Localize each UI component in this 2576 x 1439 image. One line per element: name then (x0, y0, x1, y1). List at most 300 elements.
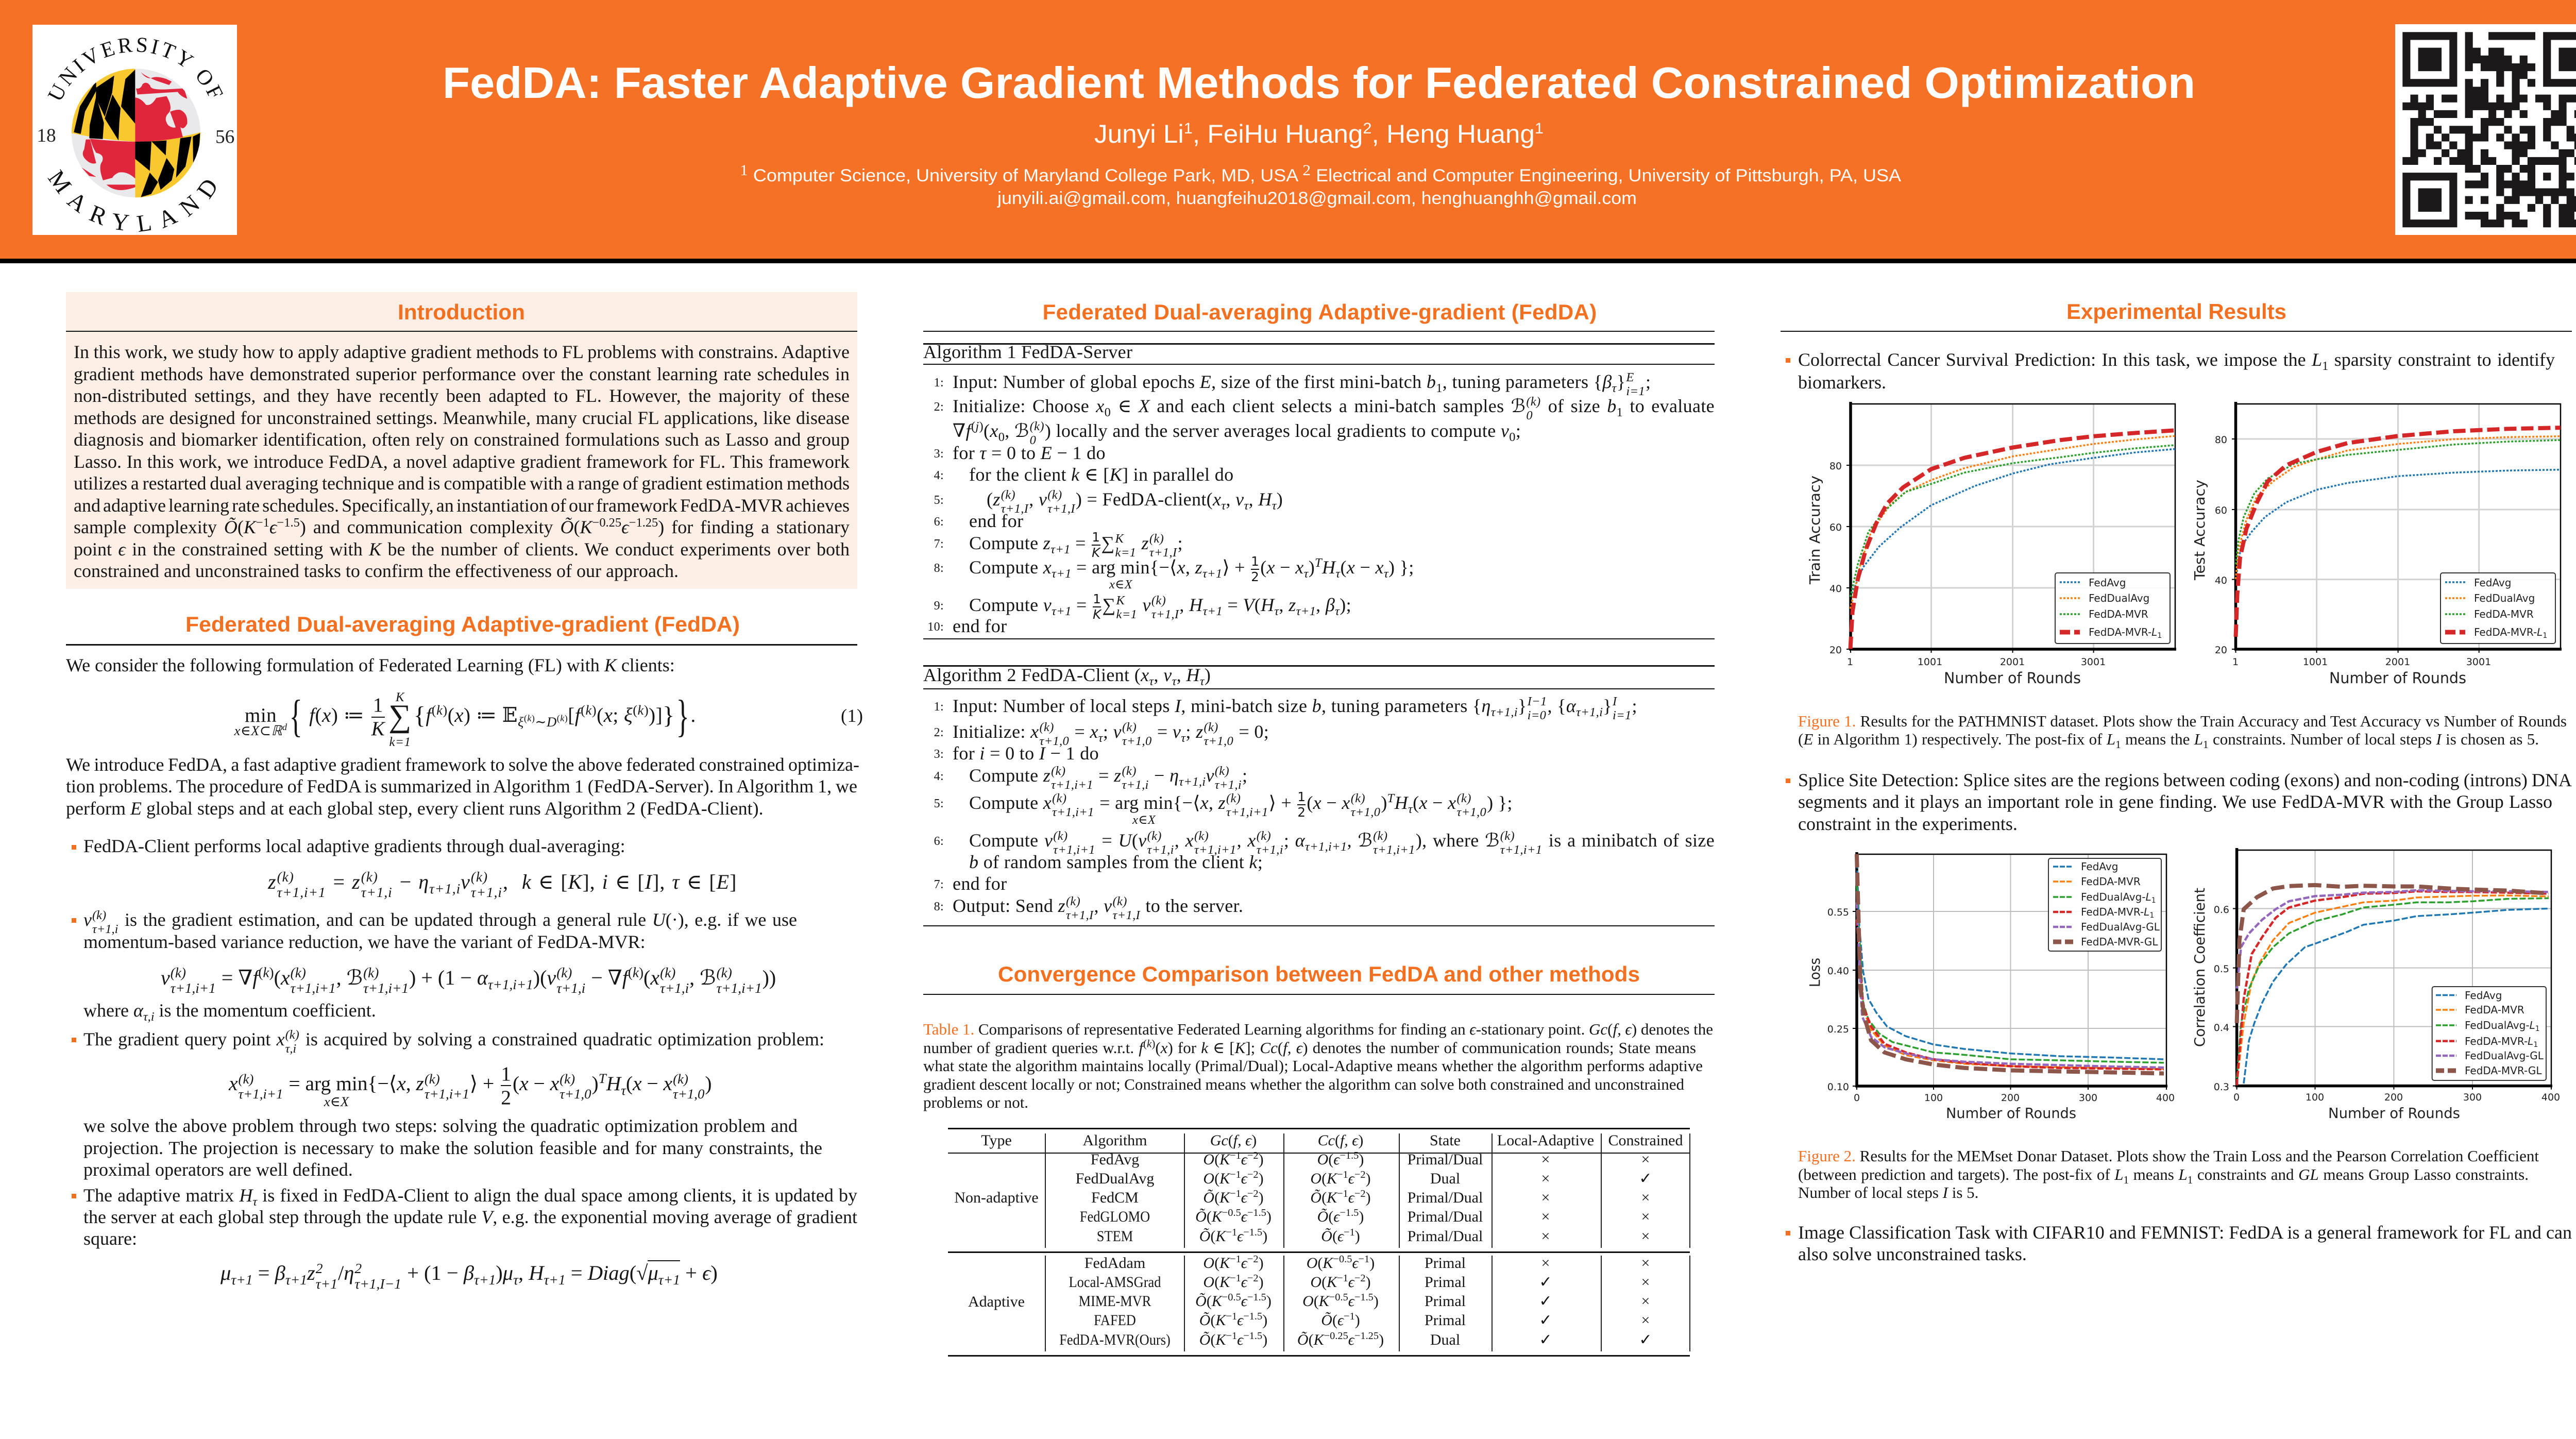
bullet: image classification task (1781, 1220, 2572, 1266)
chart: test accuracy: 1 (2232, 656, 2239, 668)
algorithm 2: FedDA-Client: (k) (1051, 764, 1065, 778)
chart: train loss: 400 (2156, 1092, 2175, 1104)
chart: train loss: FedAvg (2081, 860, 2118, 873)
algorithm 2: FedDA-Client: 2 (1297, 805, 1306, 820)
chart: train loss: 0.25 (1827, 1024, 1849, 1035)
algorithm 1: FedDA-Server: 3: (934, 447, 944, 461)
equation: FedDA-MVR variant: (k) (660, 965, 675, 980)
introduction text: diagnosis and biomarker identification, often rely on constrained formulations such as Lasso and group (74, 429, 850, 450)
comparison table: × (1641, 1189, 1650, 1206)
figure 1 caption (1798, 711, 2567, 750)
table caption: gradient descent locally or not; Constrained means whether the algorithm can solve both constrained and unconstrained (923, 1075, 1684, 1093)
figure 2 caption: (between prediction and targets). The post-fix of L1 means L1 constraints and GL means Group Lasso constraints. (1798, 1165, 2529, 1186)
algorithm 1: FedDA-Server: (k) (1526, 395, 1541, 409)
icon: QR code (2395, 24, 2576, 235)
chart: train accuracy: Number of Rounds (1944, 669, 2081, 687)
algorithm 1: FedDA-Server: 9: (934, 599, 944, 613)
text: momentum coefficient: where ατ,i is the momentum coefficient. (83, 1000, 376, 1024)
comparison table: ✓ (1639, 1170, 1652, 1187)
equation 1: (1) (841, 705, 863, 726)
authors: , FeiHu Huang (1193, 120, 1363, 148)
algorithm 1: FedDA-Server: k=1 (1116, 607, 1137, 621)
chart: train loss: 1 (2149, 911, 2154, 920)
algorithm 1: FedDA-Server: 10: (927, 620, 944, 634)
comparison table: ✓ (1539, 1312, 1552, 1329)
chart: correlation coefficient: 1 (2533, 1041, 2538, 1049)
comparison table: × (1641, 1151, 1650, 1168)
comparison table: O(ϵ−1.5) (1317, 1150, 1364, 1168)
chart: train loss: 0 (1854, 1092, 1860, 1104)
chart: train loss (1803, 848, 2179, 1123)
chart: correlation coefficient: 300 (2463, 1092, 2482, 1103)
algorithm 2: FedDA-Client: (k) (1456, 791, 1471, 805)
algorithm 2: FedDA-Client: (k) (1122, 764, 1137, 778)
bullet: splice site detection: constraint in the experiments. (1798, 814, 2018, 834)
chart: train loss: 0.55 (1827, 907, 1849, 918)
chart: correlation coefficient: FedDualAvg-L (2465, 1019, 2535, 1031)
comparison table: O(K−1ϵ−2) (1310, 1169, 1371, 1187)
comparison table: Õ(K−1ϵ−2) (1310, 1188, 1371, 1206)
logo: University of Maryland seal: 56 (215, 126, 234, 147)
chart: test accuracy (2190, 399, 2571, 688)
bullet: gradient estimation: (k) (92, 908, 106, 922)
equation: constrained quadratic problem: τ+1,0 (560, 1086, 591, 1102)
algorithm 2: FedDA-Client: (k) (1053, 829, 1067, 843)
authors: Junyi Li (1094, 120, 1182, 148)
equation: constrained quadratic problem: τ+1,0 (673, 1086, 704, 1102)
bullet: adaptive matrix (72, 1185, 857, 1249)
table caption (923, 1019, 1715, 1113)
comparison table: Adaptive (968, 1293, 1025, 1310)
chart: correlation coefficient: 0.6 (2214, 904, 2229, 916)
figure 2 caption (1798, 1146, 2539, 1204)
algorithm 2: FedDA-Client: (k) (1066, 894, 1080, 908)
algorithm 2: FedDA-Client: 8: (934, 900, 944, 913)
chart: correlation coefficient: FedAvg (2465, 989, 2502, 1002)
chart: correlation coefficient: 1 (2535, 1025, 2540, 1033)
chart: train loss: 200 (2001, 1092, 2020, 1104)
algorithm 1: FedDA-Server: 5: (934, 494, 944, 507)
introduction text: and adaptive learning rate schedules. Specifically, an instantiation of our framework FedDA-MVR achieves (74, 495, 850, 515)
chart: test accuracy: 80 (2215, 434, 2227, 446)
chart: train loss: Number of Rounds (1946, 1105, 2076, 1122)
chart: test accuracy: FedDA-MVR-L (2474, 626, 2543, 638)
comparison table: O(K−0.5ϵ−1) (1307, 1254, 1375, 1272)
equation 1: { (290, 691, 302, 741)
comparison table: Õ(ϵ−1) (1321, 1227, 1360, 1245)
table caption: what state the algorithm maintains locally (Primal/Dual); Local-Adaptive means whether the algorithm performs adaptive (923, 1057, 1703, 1075)
comparison table: Gc(f, ϵ) (1210, 1132, 1257, 1149)
algorithm 1: FedDA-Server: τ+1,I (1001, 502, 1028, 516)
comparison table: Primal (1425, 1312, 1466, 1329)
algorithm 2: FedDA-Client: τ+1,I (1066, 908, 1093, 922)
algorithm 1: FedDA-Server: i=1 (1626, 384, 1645, 398)
algorithm 2: FedDA-Client: I−1 (1528, 695, 1547, 708)
bullet: splice site detection: Splice Site Detection: Splice sites are the regions between coding (exons) and non-coding (introns) DNA (1798, 770, 2572, 790)
algorithm 2: FedDA-Client: I (1613, 695, 1617, 708)
comparison table: × (1641, 1274, 1650, 1291)
algorithm 2: FedDA-Client: (k) (1257, 829, 1271, 843)
chart: test accuracy: 1 (2543, 632, 2547, 640)
algorithm 2: FedDA-Client: τ+1,i+1 (1052, 805, 1094, 819)
text: FedDA introduction: We introduce FedDA, a fast adaptive gradient framework to solve the above federated constrained optimiza- (66, 754, 859, 775)
equation 1: min (245, 704, 277, 726)
equation: constrained quadratic problem: τ+1,i+1 (425, 1086, 469, 1102)
comparison table: × (1641, 1293, 1650, 1310)
algorithm 2: FedDA-Client: Input: Number of local steps I, mini-batch size b, tuning parameters {ητ+1,i} , {ατ+1,i} ; (953, 696, 1637, 719)
comparison table: Õ(K−1ϵ−1.5) (1199, 1311, 1267, 1329)
bullet: gradient query point: τ,i (285, 1042, 296, 1056)
chart: train accuracy: 80 (1829, 461, 1842, 472)
comparison table: Primal (1425, 1255, 1466, 1272)
algorithm 2: FedDA-Client: (k) (1052, 791, 1066, 805)
chart: train accuracy (1803, 399, 2184, 688)
panel: federated dual-averaging formulation: τ+1 (316, 1276, 337, 1292)
bullet: adaptive matrix: the server at each global step through the update rule V, e.g. the exponential moving average of gradient (83, 1207, 857, 1227)
comparison table: Primal (1425, 1274, 1466, 1291)
algorithm 1: FedDA-Server: Input: Number of global epochs E, size of the first mini-batch b1, tuning parameters {βτ} ; (953, 371, 1651, 395)
equation: FedDA-MVR variant: (k) (291, 965, 306, 980)
algorithm 2: FedDA-Client: τ+1,0 (1122, 734, 1152, 748)
chart: test accuracy: 3001 (2466, 656, 2491, 668)
comparison table: Primal/Dual (1408, 1208, 1483, 1225)
algorithm 2: FedDA-Client: 3: (934, 748, 944, 761)
equation: FedDA-MVR variant: (k) (556, 965, 572, 980)
table caption: number of gradient queries w.r.t. f(k)(x) for k ∈ [K]; Cc(f, ϵ) denotes the number of communication rounds; State means (923, 1038, 1696, 1057)
algorithm 2: FedDA-Client (923, 665, 1715, 928)
comparison table: ✓ (1639, 1331, 1652, 1348)
comparison table: FAFED (1094, 1312, 1136, 1329)
equation: constrained quadratic problem: x = {−⟨x, z ⟩ + (x − x )THτ(x − x ) (229, 1071, 712, 1098)
chart: train loss: FedDA-MVR-L (2081, 906, 2149, 918)
chart: correlation coefficient: 0.5 (2214, 963, 2229, 975)
equation: exponential moving average: μτ+1 = βτ+1z /η + (1 − βτ+1)μτ, Hτ+1 = Diag(√μτ+1 + ϵ) (221, 1261, 718, 1288)
chart: correlation coefficient: 0.4 (2214, 1022, 2229, 1034)
table caption: Table 1. Comparisons of representative Federated Learning algorithms for finding an ϵ-stationary point. Gc(f, ϵ) denotes the (923, 1020, 1713, 1038)
algorithm 2: FedDA-Client: τ+1,I (1113, 908, 1140, 922)
algorithm 1: FedDA-Server: (k) (1151, 594, 1166, 607)
algorithm 2: FedDA-Client: τ+1,i (1215, 778, 1242, 792)
algorithm 1: FedDA-Server: 7: (934, 537, 944, 551)
equation: dual averaging update: τ+1,i (361, 885, 393, 900)
equation: dual averaging update: τ+1,i+1 (277, 885, 326, 900)
equation: FedDA-MVR variant: τ+1,i (556, 980, 585, 996)
equation: FedDA-MVR variant: τ+1,i+1 (363, 980, 409, 996)
equation 1 (234, 690, 863, 749)
comparison table: Primal (1425, 1293, 1466, 1310)
chart: test accuracy: FedDA-MVR (2474, 608, 2534, 620)
heading: Federated Dual-averaging Adaptive-gradient: Federated Dual-averaging Adaptive-gradient (FedDA) (185, 612, 740, 636)
comparison table (948, 1128, 1690, 1357)
algorithm 1: FedDA-Server: K (1115, 532, 1124, 546)
algorithm 1: FedDA-Server: end for (969, 511, 1023, 531)
chart: train accuracy: FedDA-MVR-L (2089, 626, 2157, 638)
algorithm 1: FedDA-Server: Compute xτ+1 = {−⟨x, zτ+1⟩ + (x − xτ)THτ(x − xτ) }; (969, 556, 1414, 581)
equation: dual averaging update: (k) (471, 869, 488, 885)
equation: constrained quadratic problem: (k) (673, 1071, 688, 1087)
chart: train loss: 0.40 (1827, 966, 1849, 977)
algorithm 2: FedDA-Client: Compute ν = U(ν , x , x ; ατ+1,i+1, ℬ ), where ℬ is a minibatch of size (969, 830, 1715, 854)
algorithm 2: FedDA-Client: for i = 0 to I − 1 do (953, 743, 1099, 764)
table caption: problems or not. (923, 1093, 1028, 1111)
comparison table: Primal/Dual (1408, 1151, 1483, 1168)
comparison table: O(K−0.5ϵ−1.5) (1302, 1292, 1379, 1310)
bullet: splice site detection (1781, 767, 2572, 835)
equation: constrained quadratic problem (229, 1062, 712, 1109)
equation: constrained quadratic problem: (k) (239, 1071, 253, 1087)
algorithm 2: FedDA-Client: end for (953, 873, 1007, 894)
introduction text: methods are designed for unconstrained settings. Meanwhile, many crucial FL applications, like disease (74, 407, 850, 428)
logo: University of Maryland seal: UNIVERSITY OF (47, 38, 223, 99)
chart: test accuracy: 60 (2215, 505, 2227, 516)
algorithm 1: FedDA-Server: τ+1,I (1047, 502, 1075, 516)
algorithm 2: FedDA-Client: Initialize: x = xτ; ν = ντ; z = 0; (953, 721, 1269, 745)
chart: train accuracy: 20 (1829, 645, 1842, 656)
algorithm 1: FedDA-Server: 0 (1526, 409, 1533, 422)
text: two step solution (83, 1115, 822, 1180)
comparison table: ✓ (1539, 1331, 1552, 1348)
comparison table: Õ(ϵ−1.5) (1317, 1207, 1364, 1225)
bullet: splice site detection: segments and it plays an important role in gene finding. We use FedDA-MVR with the Group Lasso (1798, 791, 2552, 812)
chart: train accuracy: 1 (1847, 656, 1853, 668)
equation: FedDA-MVR variant: (k) (717, 965, 732, 980)
chart: train loss: FedDualAvg-GL (2081, 921, 2160, 933)
affiliations: Computer Science, University of Maryland College Park, MD, USA (748, 166, 1302, 185)
introduction text: Lasso. In this work, we introduce FedDA, a novel adaptive gradient framework for FL. This framework (74, 451, 850, 472)
equation: FedDA-MVR variant: τ+1,i+1 (291, 980, 336, 996)
chart: train loss: FedDA-MVR (2081, 875, 2141, 888)
figure 2 caption: Number of local steps I is 5. (1798, 1183, 1978, 1201)
comparison table: Local-AMSGrad (1069, 1274, 1161, 1291)
panel: federated dual-averaging formulation: τ+1,I−1 (354, 1276, 401, 1292)
algorithm 2: FedDA-Client: τ+1,0 (1039, 734, 1069, 748)
algorithm 1: FedDA-Server: Compute zτ+1 = ∑ z ; (969, 533, 1183, 556)
bullet: gradient estimation: ν is the gradient estimation, and can be updated through a general rule U(·), e.g. if we use (83, 909, 797, 930)
comparison table: Primal/Dual (1408, 1189, 1483, 1206)
bullet: colorectal cancer survival prediction: biomarkers. (1798, 372, 1886, 393)
algorithm 1: FedDA-Server: arg min (1092, 557, 1150, 578)
algorithm 1: FedDA-Server: 1: (934, 376, 944, 390)
equation: dual averaging update: z = z − ητ+1,iν , k ∈ [K], i ∈ [I], τ ∈ [E] (268, 870, 737, 896)
equation: constrained quadratic problem: 1 (501, 1062, 511, 1085)
panel: federated dual-averaging formulation: K (371, 718, 385, 740)
introduction text: point ϵ in the constrained setting with K be the number of clients. We conduct experiments over both (74, 539, 850, 560)
algorithm 2: FedDA-Client: τ+1,i+1 (1051, 778, 1093, 792)
comparison table: FedAvg (1091, 1151, 1139, 1168)
equation: FedDA-MVR variant: (k) (171, 965, 186, 980)
equation 1: } (676, 691, 689, 741)
chart: train accuracy: 40 (1829, 583, 1842, 595)
panel: federated dual-averaging formulation: K (396, 690, 404, 704)
introduction text: sample complexity Õ(K−1ϵ−1.5) and communication complexity Õ(K−0.25ϵ−1.25) for finding a stationary (74, 516, 850, 537)
equation: FedDA-MVR variant: τ+1,i (660, 980, 689, 996)
chart: train accuracy: 3001 (2081, 656, 2106, 668)
text: two step solution: we solve the above problem through two steps: solving the quadratic optimization problem and (83, 1115, 798, 1136)
equation: constrained quadratic problem: (k) (560, 1071, 575, 1087)
comparison table: Primal/Dual (1408, 1228, 1483, 1245)
comparison table: O(K−1ϵ−2) (1203, 1150, 1264, 1168)
algorithm 1: FedDA-Server: (k) (1149, 532, 1164, 546)
equation: FedDA-MVR variant: (k) (363, 965, 379, 980)
algorithm 1: FedDA-Server: ∇f(j)(x0, ℬ ) locally and the server averages local gradients to compute ν0; (953, 419, 1521, 444)
algorithm 2: FedDA-Client: b of random samples from the client k; (969, 852, 1263, 872)
text: two step solution: proximal operators are well defined. (83, 1159, 353, 1180)
algorithm 1: FedDA-Server: τ+1,I (1149, 546, 1177, 560)
figure 1 caption: Figure 1. Results for the PATHMNIST dataset. Plots show the Train Accuracy and Test Accuracy vs Number of Rounds (1798, 712, 2567, 730)
introduction text: In this work, we study how to apply adaptive gradient methods to FL problems with constrains. Adaptive (74, 342, 850, 362)
chart: correlation coefficient: FedDA-MVR-GL (2465, 1064, 2542, 1077)
bullet: colorectal cancer survival prediction (1781, 347, 2572, 396)
bullet: gradient query point: The gradient query point x is acquired by solving a constrained quadratic optimization problem: (83, 1029, 824, 1049)
algorithm 2: FedDA-Client: 6: (934, 835, 944, 848)
figure 2 caption: Figure 2. Results for the MEMset Donar Dataset. Plots show the Train Loss and the Pearson Correlation Coefficient (1798, 1147, 2539, 1165)
bullet: gradient query point: (k) (285, 1028, 299, 1042)
comparison table: × (1641, 1312, 1650, 1329)
logo: University of Maryland seal (32, 25, 237, 235)
comparison table: Algorithm (1083, 1132, 1147, 1149)
equation: constrained quadratic problem: τ+1,i+1 (239, 1086, 283, 1102)
bullet: adaptive matrix: square: (83, 1228, 137, 1249)
comparison table: × (1641, 1208, 1650, 1225)
algorithm 1: FedDA-Server: k=1 (1115, 546, 1136, 560)
chart: correlation coefficient: FedDA-MVR-L (2465, 1035, 2533, 1047)
comparison table: Non-adaptive (954, 1189, 1039, 1206)
text: FedDA introduction: tion problems. The procedure of FedDA is summarized in Algorithm 1 (FedDA-Server). In Algorithm 1, we (66, 776, 857, 797)
algorithm 2: FedDA-Client: τ+1,0 (1456, 805, 1486, 819)
affiliations: 1 (740, 162, 748, 179)
figure 1 caption: (E in Algorithm 1) respectively. The post-fix of L1 means the L1 constraints. Number of local steps I is chosen as 5. (1798, 730, 2539, 751)
algorithm 2: FedDA-Client: τ+1,i+1 (1226, 805, 1268, 819)
algorithm 2: FedDA-Client: 7: (934, 878, 944, 891)
chart: correlation coefficient (2190, 845, 2566, 1123)
algorithm 1: FedDA-Server (923, 343, 1715, 639)
comparison table: × (1641, 1255, 1650, 1272)
chart: train loss: 300 (2079, 1092, 2097, 1104)
comparison table: Cc(f, ϵ) (1318, 1132, 1363, 1149)
algorithm 2: FedDA-Client: arg min (1115, 792, 1173, 813)
chart: test accuracy: FedDualAvg (2474, 592, 2535, 604)
algorithm 1: FedDA-Server: Algorithm 1 FedDA-Server (923, 342, 1132, 362)
chart: correlation coefficient: 400 (2541, 1092, 2560, 1103)
chart: train accuracy: 2001 (2000, 656, 2025, 668)
algorithm 1: FedDA-Server: 1 (1092, 530, 1100, 545)
chart: test accuracy: FedAvg (2474, 577, 2511, 589)
algorithm 1: FedDA-Server: 2: (934, 400, 944, 414)
emails: junyili.ai@gmail.com, huangfeihu2018@gmail.com, henghuanghh@gmail.com (997, 189, 1637, 208)
bullet: colorectal cancer survival prediction: Colorrectal Cancer Survival Prediction: In this task, we impose the L1 sparsity constraint to identify (1798, 349, 2555, 373)
algorithm 1: FedDA-Server: for the client k ∈ [K] in parallel do (969, 464, 1233, 485)
algorithm 1: FedDA-Server: end for (953, 616, 1007, 636)
text: formulation intro: We consider the following formulation of Federated Learning (FL) with K clients: (66, 655, 675, 675)
chart: test accuracy: 40 (2215, 575, 2227, 586)
panel: algorithms (923, 292, 1715, 931)
comparison table: FedAdam (1084, 1255, 1145, 1272)
algorithm 2: FedDA-Client: 5: (934, 797, 944, 810)
algorithm 1: FedDA-Server: 1 (1093, 591, 1101, 606)
algorithm 2: FedDA-Client: (k) (1204, 720, 1218, 734)
algorithm 2: FedDA-Client: x∈X (1132, 813, 1156, 827)
algorithm 1: FedDA-Server: E (1626, 370, 1634, 384)
chart: correlation coefficient: Number of Rounds (2328, 1105, 2460, 1122)
equation: constrained quadratic problem: (k) (425, 1071, 440, 1087)
algorithm 2: FedDA-Client: (k) (1039, 720, 1054, 734)
algorithm 2: FedDA-Client: (k) (1373, 829, 1387, 843)
authors: , Heng Huang (1372, 120, 1535, 148)
comparison table: FedDualAvg (1076, 1170, 1154, 1187)
panel: federated dual-averaging formulation: 1 (373, 694, 383, 716)
equation: exponential moving average: 2 (354, 1260, 362, 1276)
panel: federated dual-averaging formulation: x∈X (324, 1094, 349, 1109)
algorithm 1: FedDA-Server: τ+1,I (1151, 607, 1179, 621)
equation: exponential moving average: 2 (316, 1260, 323, 1276)
panel: convergence comparison (923, 958, 1715, 1360)
chart: train accuracy: Train Accuracy (1806, 476, 1823, 585)
equation: dual averaging update: τ+1,i (471, 885, 502, 900)
chart: correlation coefficient: FedDA-MVR (2465, 1004, 2524, 1016)
panel: introduction (66, 292, 857, 589)
comparison table: Dual (1430, 1331, 1460, 1348)
comparison table: × (1541, 1208, 1550, 1225)
comparison table: × (1541, 1189, 1550, 1206)
comparison table: FedGLOMO (1080, 1208, 1150, 1225)
chart: correlation coefficient: 0 (2233, 1092, 2240, 1103)
introduction text: constrained and unconstrained tasks to confirm the effectiveness of our approach. (74, 561, 679, 581)
comparison table: STEM (1097, 1228, 1133, 1245)
algorithm 1: FedDA-Server: 4: (934, 469, 944, 482)
chart: test accuracy: Number of Rounds (2329, 669, 2466, 687)
algorithm 2: FedDA-Client: (k) (1194, 829, 1209, 843)
authors: 2 (1363, 120, 1372, 137)
algorithm 2: FedDA-Client: 1: (934, 700, 944, 714)
text: FedDA introduction (66, 754, 859, 819)
algorithm 2: FedDA-Client: τ+1,i+1 (1053, 843, 1095, 857)
chart: train accuracy: 1001 (1918, 656, 1942, 668)
algorithm 2: FedDA-Client: i=1 (1613, 708, 1632, 722)
algorithm 2: FedDA-Client: (k) (1147, 829, 1162, 843)
comparison table: Õ(ϵ−1) (1321, 1311, 1360, 1329)
algorithm 2: FedDA-Client: Output: Send z , ν to the server. (953, 895, 1243, 916)
algorithm 2: FedDA-Client: (k) (1113, 894, 1127, 908)
algorithm 2: FedDA-Client: τ+1,i (1257, 843, 1283, 857)
algorithm 2: FedDA-Client: Compute x = {−⟨x, z ⟩ + (x − x )THτ(x − x ) }; (969, 791, 1513, 816)
heading: Convergence Comparison: Convergence Comparison between FedDA and other methods (998, 962, 1640, 986)
comparison table: × (1541, 1255, 1550, 1272)
comparison table: ✓ (1539, 1293, 1552, 1310)
comparison table: O(K−1ϵ−2) (1203, 1169, 1264, 1187)
bullet: image classification task: also solve unconstrained tasks. (1798, 1244, 2027, 1264)
chart: train accuracy: 60 (1829, 522, 1842, 533)
chart: correlation coefficient: 200 (2384, 1092, 2403, 1103)
authors: 1 (1184, 120, 1193, 137)
algorithm 1: FedDA-Server: (k) (1001, 488, 1015, 502)
equation: dual averaging update: (k) (361, 869, 378, 885)
comparison table: × (1541, 1151, 1550, 1168)
algorithm 1: FedDA-Server: (z , ν ) = FedDA-client(xτ, ντ, Hτ) (987, 489, 1283, 513)
heading: Federated Dual-averaging Adaptive-gradient: Federated Dual-averaging Adaptive-gradient (FedDA) (1043, 300, 1597, 324)
algorithm 1: FedDA-Server: K (1093, 607, 1101, 622)
algorithm 2: FedDA-Client: 4: (934, 770, 944, 783)
panel: federated dual-averaging formulation: 2 (501, 1086, 511, 1109)
chart: train accuracy: 1 (2157, 632, 2162, 640)
authors: 1 (1535, 120, 1544, 137)
introduction text: gradient methods have demonstrated superior performance over the constant learning rate schedules in (74, 364, 850, 384)
title: FedDA: Faster Adaptive Gradient Methods for Federated Constrained Optimization (443, 59, 2195, 108)
comparison table: ✓ (1539, 1274, 1552, 1291)
affiliations: Electrical and Computer Engineering, University of Pittsburgh, PA, USA (1311, 166, 1901, 185)
algorithm 2: FedDA-Client: (k) (1351, 791, 1365, 805)
bullet: gradient estimation: momentum-based variance reduction, we have the variant of FedDA-MVR: (83, 932, 646, 952)
chart: correlation coefficient: 0.3 (2214, 1081, 2229, 1093)
